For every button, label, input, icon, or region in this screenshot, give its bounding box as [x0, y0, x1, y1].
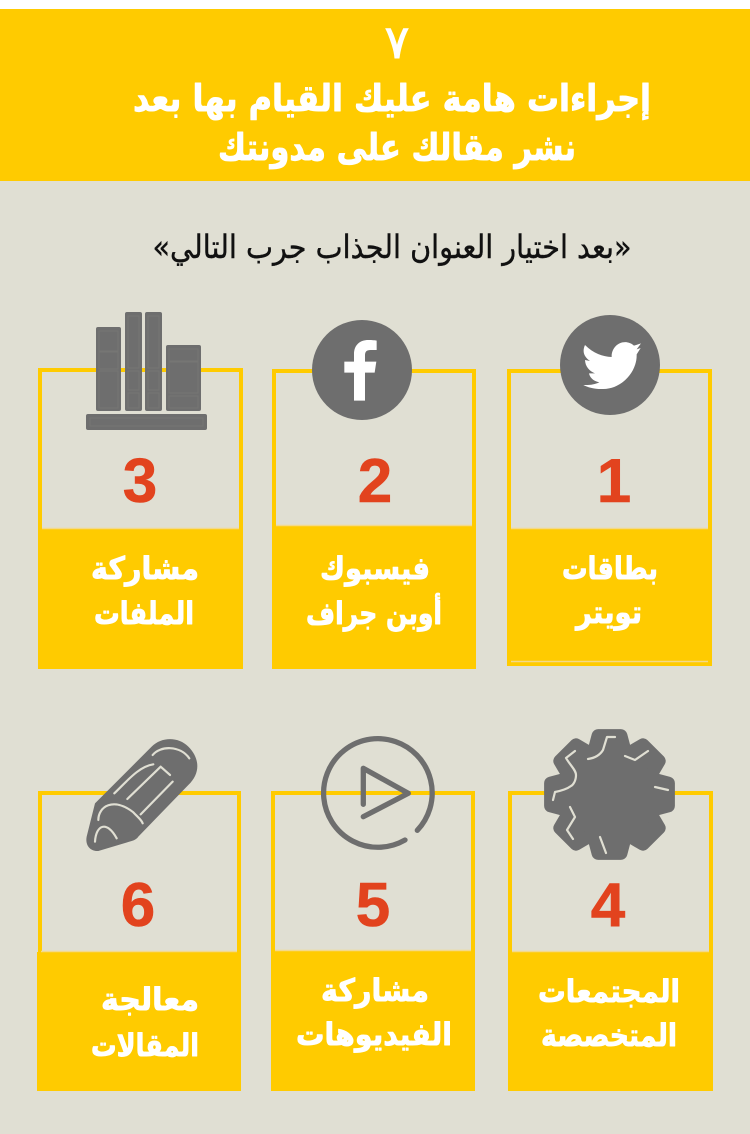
- title line 2: نشر مقالك على مدونتك: [218, 126, 576, 169]
- label: مشاركة: [91, 551, 199, 587]
- label: [91, 982, 199, 1064]
- card 4: specialized communities: [508, 736, 713, 1091]
- icon: play: [324, 739, 432, 847]
- label: [91, 551, 199, 632]
- icon: pencil: [86, 739, 197, 851]
- label: [538, 974, 680, 1054]
- label: بطاقات: [562, 551, 658, 587]
- label: المجتمعات: [538, 974, 680, 1010]
- card 6: article processing: [37, 739, 241, 1091]
- title number: ٧: [385, 15, 409, 69]
- number 5: 5: [356, 871, 390, 940]
- label: مشاركة: [321, 973, 429, 1009]
- label: معالجة: [101, 982, 199, 1018]
- icon: twitter: [560, 315, 660, 415]
- number 4: 4: [591, 871, 626, 940]
- title line 1: إجراءات هامة عليك القيام بها بعد: [133, 77, 651, 121]
- number 1: 1: [597, 447, 631, 516]
- label: الفيديوهات: [296, 1017, 452, 1053]
- header banner: [0, 0, 750, 181]
- number 3: 3: [123, 447, 157, 516]
- label: [306, 551, 442, 632]
- card 1: Twitter cards: [508, 315, 712, 666]
- icon: facebook: [312, 320, 412, 420]
- label: تويتر: [574, 595, 642, 631]
- label: أوبن جراف: [306, 593, 442, 632]
- number 2: 2: [358, 447, 392, 516]
- label: [562, 551, 658, 631]
- card 3: file sharing: [38, 312, 243, 669]
- subtitle: «بعد اختيار العنوان الجذاب جرب التالي»: [152, 228, 632, 266]
- number 6: 6: [121, 871, 155, 940]
- label: فيسبوك: [320, 551, 430, 587]
- icon: books: [86, 312, 207, 430]
- label: المقالات: [91, 1028, 199, 1064]
- card 5: video sharing: [271, 739, 475, 1091]
- card 2: Facebook Open Graph: [272, 320, 476, 669]
- icon: gear: [551, 736, 668, 853]
- label: [296, 973, 452, 1053]
- label: المتخصصة: [541, 1018, 677, 1054]
- label: الملفات: [94, 596, 194, 632]
